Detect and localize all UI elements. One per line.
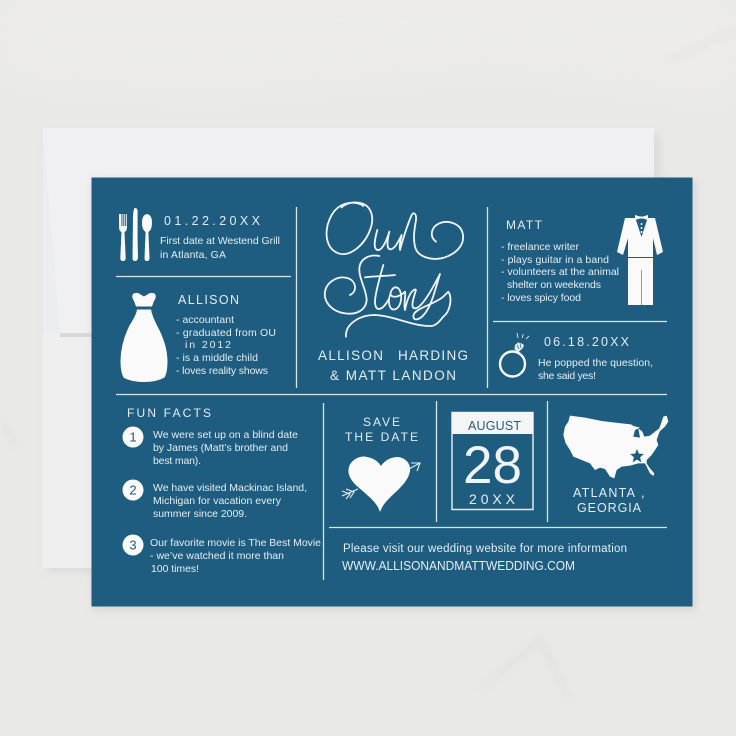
details: - is a middle child <box>176 352 258 364</box>
icon: ring <box>500 333 529 376</box>
details <box>501 241 619 304</box>
panel: save the date <box>342 415 420 512</box>
panel: fun facts <box>122 406 321 575</box>
details: - volunteers at the animal <box>501 266 619 278</box>
icon: USA map <box>563 416 668 478</box>
envelope <box>43 128 661 572</box>
name: ALLISON <box>178 293 239 307</box>
heading: FUN FACTS <box>127 406 211 420</box>
date: 06.18.20XX <box>544 335 630 349</box>
location name: ATLANTA <box>573 486 636 500</box>
panel: location <box>563 416 668 515</box>
names: & MATT LANDON <box>330 368 456 383</box>
details: in 2012 <box>185 339 231 351</box>
fact 2: Michigan for vacation every <box>153 495 282 507</box>
fact 2: 2 <box>129 482 137 498</box>
panel: calendar <box>452 412 533 510</box>
panel: Allison <box>120 293 276 382</box>
icon: tuxedo <box>617 215 663 305</box>
fact 1: 1 <box>129 430 137 444</box>
heading <box>345 415 418 444</box>
divider lines <box>116 207 667 580</box>
icon: cutlery <box>119 208 152 261</box>
description: First date at Westend Grill <box>160 235 280 247</box>
location name: , <box>641 486 644 500</box>
names <box>318 348 468 383</box>
details: - plays guitar in a band <box>501 254 609 266</box>
location name: GEORGIA <box>577 501 642 515</box>
day: 28 <box>463 436 522 495</box>
invitation card <box>92 178 692 606</box>
year: 20XX <box>469 491 516 507</box>
panel: first date <box>119 208 280 261</box>
icon: star <box>630 449 644 462</box>
fact 3: Our favorite movie is The Best Movie <box>150 537 321 549</box>
details <box>176 314 276 377</box>
description: she said yes! <box>538 370 596 382</box>
panel: Matt <box>501 215 663 305</box>
details: - graduated from OU <box>176 327 276 339</box>
month: AUGUST <box>468 419 521 433</box>
description: He popped the question, <box>538 357 653 369</box>
details: - accountant <box>176 314 234 326</box>
fact 2: We have visited Mackinac Island, <box>153 482 307 494</box>
fact 1: by James (Matt’s brother and <box>153 442 288 454</box>
heading: SAVE <box>363 415 400 429</box>
panel: website: WWW.ALLISONANDMATTWEDDING.COM <box>342 559 575 573</box>
card shadow <box>92 180 696 610</box>
fact 3: 3 <box>129 538 137 552</box>
panel: website: Please visit our wedding website for more information <box>343 543 627 555</box>
fact 2 <box>122 480 307 520</box>
icon: wedding dress <box>120 293 168 382</box>
date: 01.22.20XX <box>164 214 261 228</box>
fact 3: - we’ve watched it more than <box>150 550 284 562</box>
description <box>538 357 653 382</box>
details: - freelance writer <box>501 241 580 253</box>
name: MATT <box>506 218 543 232</box>
title: Our Story <box>325 202 463 337</box>
panel: website <box>342 543 627 573</box>
description <box>160 235 280 261</box>
names: ALLISON <box>318 348 383 363</box>
details: shelter on weekends <box>507 279 601 291</box>
fact 1 <box>122 426 298 467</box>
details: - loves spicy food <box>501 292 581 304</box>
description: in Atlanta, GA <box>160 249 226 261</box>
panel: proposal <box>500 333 653 382</box>
names: HARDING <box>398 348 468 363</box>
heading: THE DATE <box>345 430 418 444</box>
details: - loves reality shows <box>176 365 268 377</box>
location name <box>573 486 644 515</box>
fact 3 <box>122 534 321 575</box>
icon: heart with arrow <box>342 457 420 512</box>
fact 1: We were set up on a blind date <box>153 429 298 441</box>
fact 3: 100 times! <box>151 563 199 575</box>
fact 2: summer since 2009. <box>153 508 247 520</box>
fact 1: best man). <box>153 455 201 467</box>
